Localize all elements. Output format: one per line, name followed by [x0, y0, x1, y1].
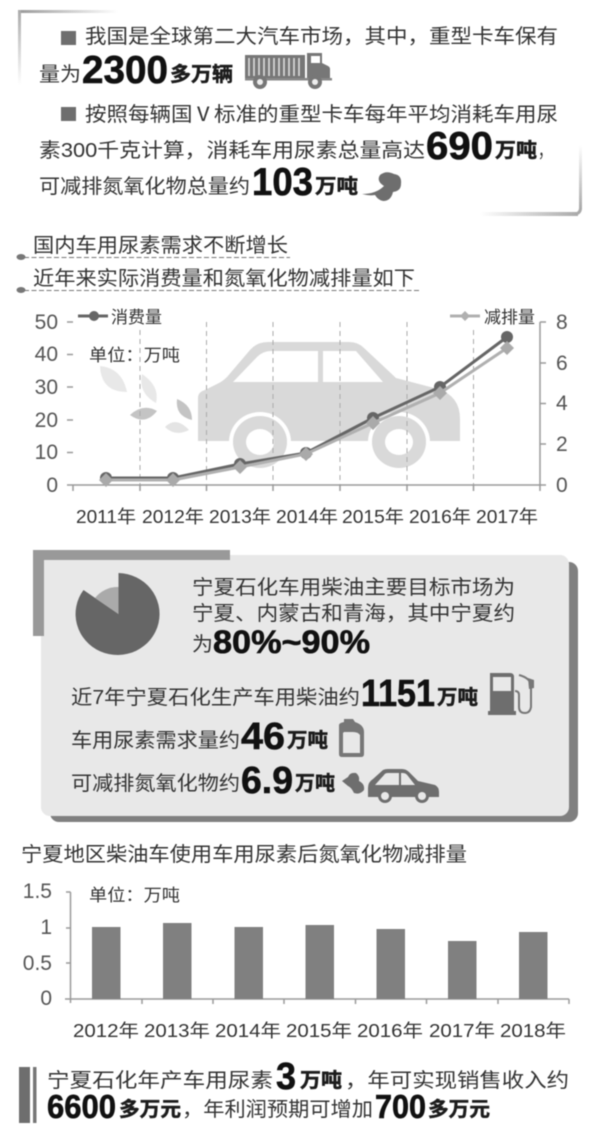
text: target market: 80%~90%	[213, 624, 370, 660]
text: urea consumption calculation: 按照每辆国Ⅴ标准的重型卡车每年平均消耗车用尿	[85, 103, 558, 126]
unit label: 单位：万吨	[89, 346, 180, 365]
axes	[65, 892, 569, 1004]
right axis labels	[556, 311, 568, 497]
text: diesel output: 万吨	[437, 686, 478, 709]
illustration: leaves	[100, 366, 192, 433]
callout: annual output and revenue: ，年可实现销售收入约	[345, 1069, 569, 1092]
y axis labels: 1.5	[23, 880, 52, 903]
series: reduction	[99, 341, 514, 487]
legend: reduction	[450, 308, 535, 327]
illustration: car silhouette	[198, 342, 460, 472]
text: truck market statement	[39, 25, 558, 92]
icon: truck	[245, 53, 332, 89]
text: urea demand	[71, 716, 328, 758]
text: NOx reduction: 可减排氮氧化物约	[71, 772, 240, 795]
icon: fuel pump	[488, 673, 534, 715]
pie chart: market share	[76, 573, 160, 655]
panel: national truck statistics	[18, 10, 582, 216]
icon: smoke and car	[342, 769, 439, 803]
axes	[67, 322, 546, 491]
x axis labels	[76, 507, 538, 527]
text: NOx reduction: 6.9	[241, 760, 293, 802]
icon: urea jug	[339, 719, 364, 757]
x axis labels: 2017年	[429, 1021, 495, 1041]
x axis labels: 2016年	[409, 507, 471, 527]
text: target market	[192, 576, 515, 660]
grid lines	[140, 322, 474, 485]
x axis labels: 2016年	[357, 1021, 423, 1041]
text: urea consumption calculation: 690	[426, 125, 493, 168]
series: consumption	[100, 331, 513, 484]
x axis labels: 2013年	[209, 507, 271, 527]
text: urea consumption calculation: 103	[252, 161, 313, 204]
bar chart: Ningxia NOx reduction 2012-2018	[23, 880, 569, 1041]
x axis labels: 2014年	[215, 1021, 281, 1041]
callout: annual output and revenue: 多万元	[428, 1098, 490, 1121]
text: urea consumption calculation: ，	[538, 140, 552, 162]
legend: consumption: 消费量	[111, 308, 162, 327]
right axis labels: 8	[556, 311, 568, 334]
x axis labels: 2015年	[286, 1021, 352, 1041]
line chart: consumption and NOx reduction 2011-2017	[35, 308, 568, 527]
x axis labels: 2012年	[73, 1021, 139, 1041]
text: NOx reduction: 万吨	[295, 772, 335, 795]
x axis labels: 2013年	[144, 1021, 210, 1041]
callout: annual output and revenue: 多万元	[119, 1098, 181, 1121]
text: urea consumption calculation: 万吨	[495, 139, 537, 162]
text: truck market statement: 多万辆	[170, 63, 233, 86]
text: urea consumption calculation: 素300千克计算，消耗车用尿素总量高达	[39, 139, 425, 162]
callout: annual output and revenue: 6600	[47, 1088, 116, 1125]
left axis labels: 20	[35, 409, 58, 432]
text: urea demand: 车用尿素需求量约	[71, 729, 240, 752]
icon: exhaust smoke	[362, 172, 401, 201]
callout: annual output and revenue: 万吨	[300, 1069, 342, 1092]
left axis labels: 50	[35, 311, 58, 334]
text: target market: 宁夏石化车用柴油主要目标市场为	[192, 576, 515, 599]
x axis labels: 2012年	[142, 507, 204, 527]
text: truck market statement: 量为	[39, 63, 81, 86]
heading: Ningxia NOx reduction: 宁夏地区柴油车使用车用尿素后氮氧化物减排量	[21, 843, 467, 866]
heading: consumption and reduction: 近年来实际消费量和氮氧化物减排量如下	[33, 267, 415, 290]
text: urea demand: 46	[241, 716, 285, 758]
left axis labels: 40	[35, 343, 58, 366]
left axis labels: 0	[46, 474, 58, 497]
text: target market: 为	[192, 633, 213, 656]
callout: annual output and revenue: ，年利润预期可增加	[182, 1098, 373, 1121]
legend: reduction: 减排量	[484, 308, 535, 327]
callout: annual output and revenue: 700	[375, 1088, 426, 1125]
text: urea consumption calculation	[39, 103, 558, 204]
x axis labels: 2015年	[342, 507, 404, 527]
right axis labels: 0	[556, 474, 568, 497]
unit label: 单位：万吨	[89, 886, 180, 905]
callout: annual output and revenue	[19, 1056, 569, 1125]
bars	[92, 923, 548, 999]
text: urea consumption calculation: 可减排氮氧化物总量约	[39, 175, 250, 198]
legend: consumption	[78, 308, 162, 327]
text: urea consumption calculation: 万吨	[315, 175, 358, 198]
text: diesel output	[71, 673, 478, 715]
text: diesel output: 近7年宁夏石化生产车用柴油约	[71, 686, 360, 709]
heading: domestic demand: 国内车用尿素需求不断增长	[33, 234, 288, 257]
callout: annual output and revenue: 3	[276, 1056, 296, 1098]
left axis labels: 30	[35, 376, 58, 399]
text: truck market statement: 2300	[82, 49, 168, 92]
panel: Ningxia Petrochemical	[33, 550, 578, 822]
x axis labels: 2014年	[276, 507, 338, 527]
y axis labels: 1	[40, 916, 52, 939]
left axis labels	[35, 311, 58, 497]
y axis labels: 0	[40, 987, 52, 1010]
right axis labels: 6	[556, 352, 568, 375]
text: truck market statement: 我国是全球第二大汽车市场，其中，重型卡车保有	[85, 25, 558, 48]
y axis labels	[23, 880, 52, 1010]
x axis labels: 2017年	[476, 507, 538, 527]
text: NOx reduction	[71, 760, 335, 802]
right axis labels: 4	[556, 392, 568, 415]
text: diesel output: 1151	[361, 673, 435, 715]
text: target market: 宁夏、内蒙古和青海，其中宁夏约	[192, 602, 515, 625]
x axis labels: 2011年	[76, 507, 136, 527]
x axis labels: 2018年	[500, 1021, 566, 1041]
y axis labels: 0.5	[23, 952, 52, 975]
left axis labels: 10	[35, 441, 58, 464]
right axis labels: 2	[556, 433, 568, 456]
text: urea demand: 万吨	[287, 729, 328, 752]
x axis labels	[73, 1021, 566, 1041]
callout: annual output and revenue: 宁夏石化年产车用尿素	[47, 1069, 273, 1092]
